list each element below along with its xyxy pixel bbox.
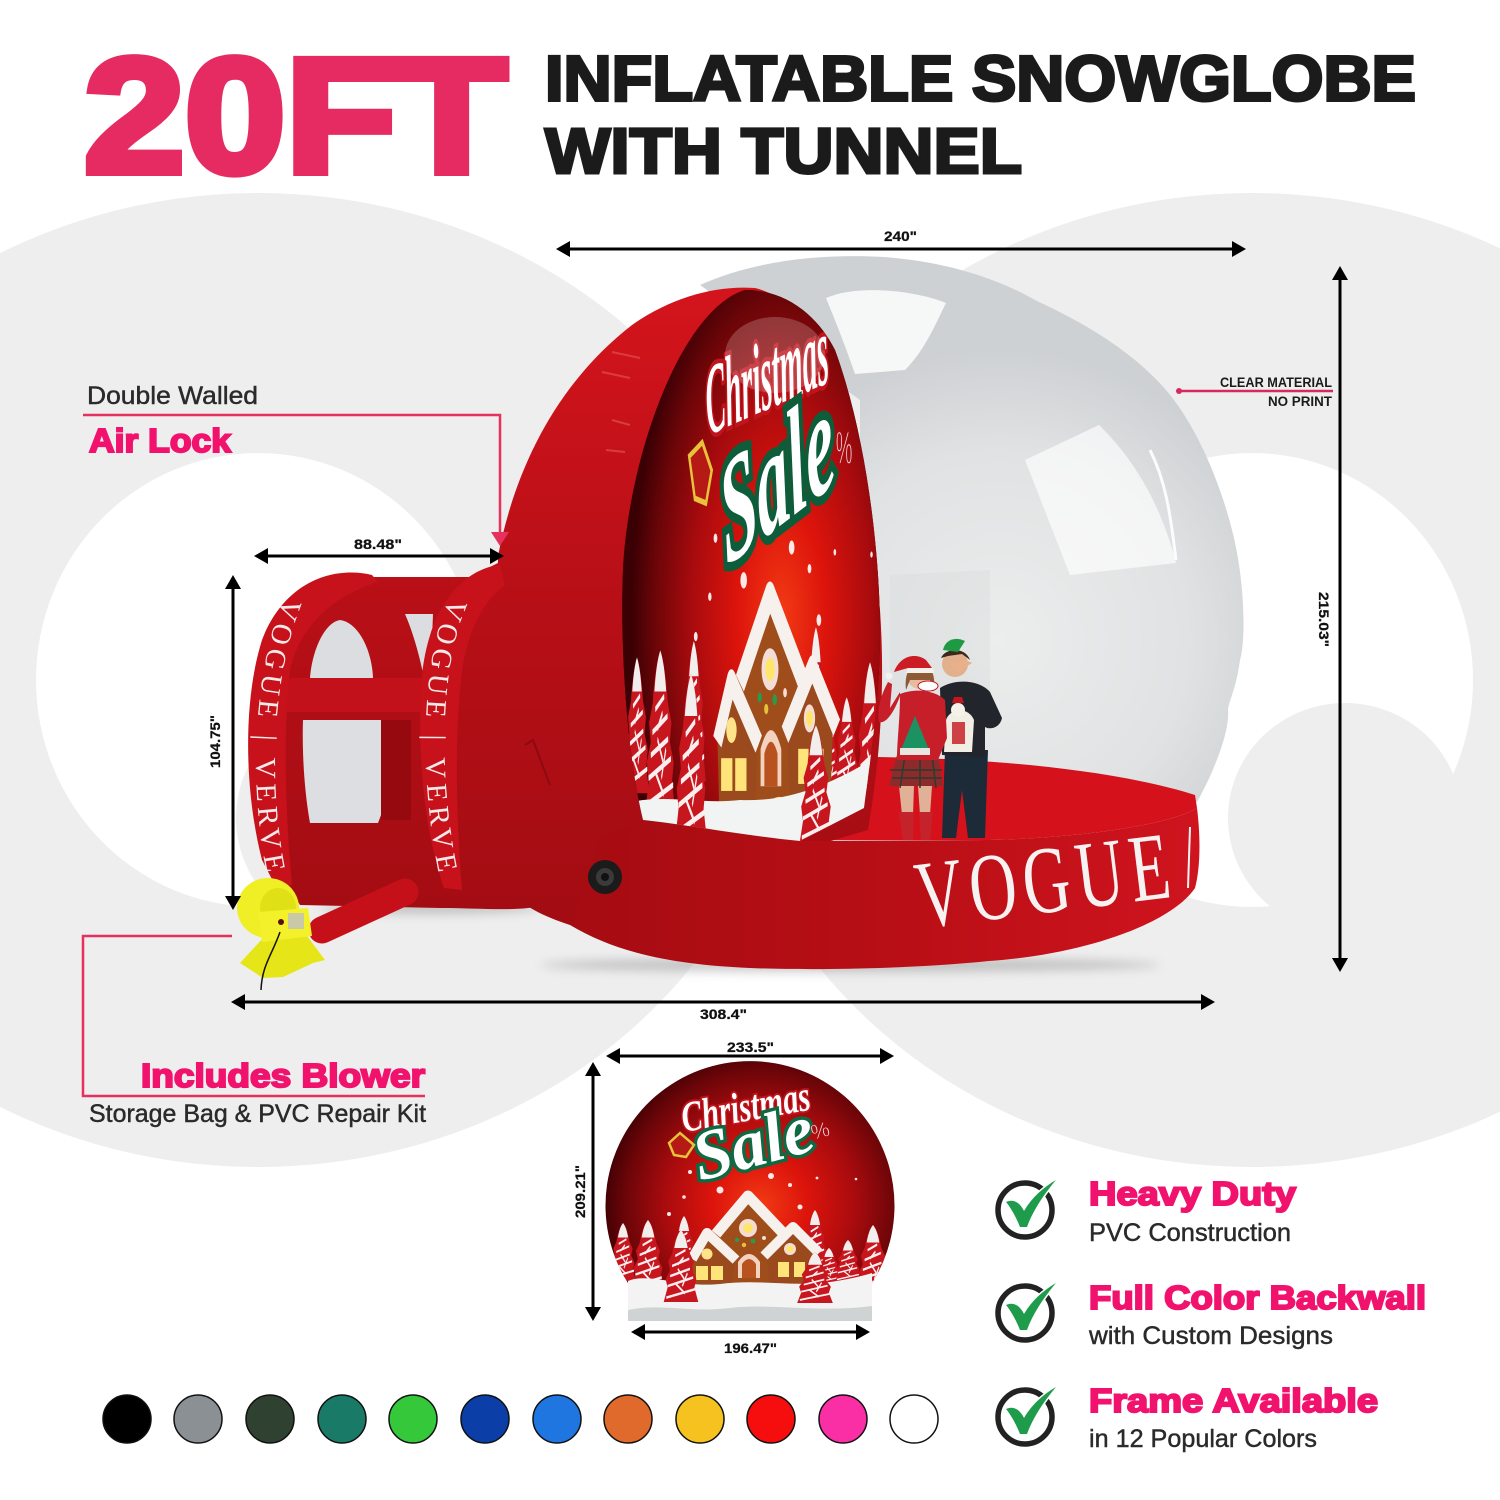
air valve (588, 860, 622, 894)
dimension: 308.4 overall length (231, 994, 1215, 1022)
dimension: 215.03 height (1316, 266, 1348, 972)
tunnel cross bar (285, 678, 425, 712)
blower (237, 878, 325, 990)
backwall artwork: % (808, 1118, 832, 1145)
tunnel window: far side (405, 614, 433, 673)
tunnel side crease (525, 740, 550, 785)
dimension: 240 width (556, 229, 1246, 257)
tunnel inner ring (420, 565, 505, 890)
colour swatches (103, 1395, 938, 1443)
feature: heavy duty (998, 1175, 1297, 1247)
dimension: 104.75 tunnel height (208, 575, 241, 910)
backwall lettering: Christmas (678, 1073, 814, 1142)
feature: frame available: Frame Available (1089, 1382, 1378, 1419)
icon: check (998, 1283, 1056, 1340)
tunnel window: lower (303, 720, 381, 823)
feature: full color backwall: Full Color Backwall (1089, 1279, 1426, 1316)
backwall artwork (600, 1055, 900, 1325)
tunnel (248, 563, 551, 910)
dimension: 209.21 backwall height: 209.21" (573, 1165, 588, 1218)
callout: clear material (1176, 375, 1333, 409)
feature: heavy duty: PVC Construction (1089, 1219, 1291, 1247)
red shell (497, 288, 882, 925)
dimension: 209.21 backwall height (573, 1062, 601, 1321)
feature: heavy duty: Heavy Duty (1089, 1175, 1297, 1212)
icon: check (998, 1387, 1056, 1444)
floor (800, 757, 1197, 840)
dimension: 215.03 height: 215.03" (1316, 592, 1331, 647)
dimension: 104.75 tunnel height: 104.75" (208, 715, 223, 768)
dimension: 240 width: 240" (884, 229, 917, 244)
dimension: 233.5 backwall width (606, 1040, 894, 1064)
callout: includes blower (83, 936, 426, 1128)
ground shadow (320, 902, 1160, 972)
feature: full color backwall (998, 1279, 1426, 1350)
dimension: 308.4 overall length: 308.4" (700, 1007, 747, 1022)
dimension: 196.47 backwall base: 196.47" (724, 1341, 777, 1356)
backwall artwork: Sale (684, 1091, 822, 1196)
person: woman (878, 656, 947, 840)
panel lettering: % (836, 421, 853, 474)
dimension: 196.47 backwall base (631, 1324, 870, 1356)
callout: includes blower: Storage Bag & PVC Repair Kit (89, 1100, 426, 1128)
callout: air lock: Double Walled (87, 382, 258, 410)
shell fold highlights (602, 352, 640, 452)
ring lettering: outer: VOGUE | VERVE (250, 603, 302, 872)
panel lettering (688, 332, 852, 572)
tunnel window: upper arch (310, 620, 373, 678)
feature: frame available: in 12 Popular Colors (1089, 1425, 1317, 1453)
callout: includes blower: Includes Blower (141, 1057, 425, 1094)
base band (570, 808, 1199, 969)
clear dome (700, 256, 1244, 802)
inflatable snowglobe illustration (237, 256, 1244, 1058)
title: product name: WITH TUNNEL (545, 115, 1022, 187)
callout: air lock: Air Lock (89, 422, 232, 459)
dimension: 88.48 tunnel length: 88.48" (354, 537, 402, 552)
panel lettering: Sale (711, 353, 842, 598)
panel snow (638, 760, 870, 841)
callout: clear material: NO PRINT (1268, 394, 1333, 409)
dimension: 233.5 backwall width: 233.5" (727, 1040, 774, 1055)
ring lettering: inner: VOGUE | VERVE (419, 604, 468, 872)
callout: clear material: CLEAR MATERIAL (1220, 375, 1332, 390)
title: product name: INFLATABLE SNOWGLOBE (545, 42, 1416, 114)
dimension: 88.48 tunnel length (254, 537, 504, 564)
people (878, 639, 1002, 840)
title: product name (545, 42, 1416, 187)
background: grey swirl shapes (0, 193, 1500, 1167)
tunnel outer ring (248, 573, 378, 885)
blower hose (322, 892, 405, 930)
backdrop print on shell (622, 290, 880, 841)
panel lettering: Christmas (702, 294, 832, 457)
VOGUE print on band: VOGUE (910, 812, 1176, 949)
icon: check (998, 1180, 1056, 1237)
backwall snow (628, 1273, 872, 1310)
person: man (940, 639, 1002, 838)
feature: frame available (998, 1382, 1378, 1453)
callout: air lock (83, 382, 509, 546)
feature: full color backwall: with Custom Designs (1088, 1322, 1333, 1350)
title: 20FT: 20FT (84, 24, 507, 207)
